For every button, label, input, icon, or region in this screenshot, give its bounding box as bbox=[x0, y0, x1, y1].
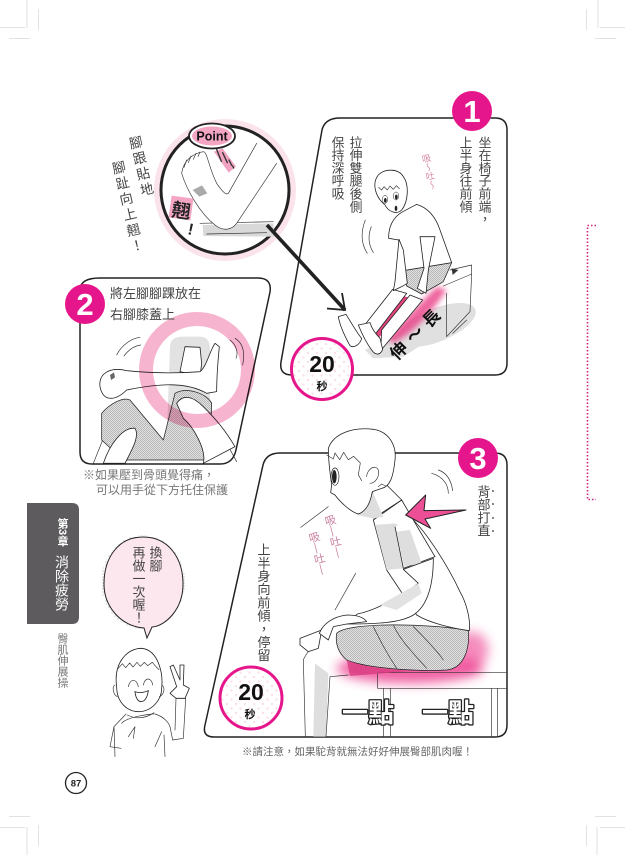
illustration: boy seated leaning forward bbox=[300, 429, 506, 737]
text: breathing note: 吸～吐～ bbox=[420, 153, 437, 190]
text: back straight: 背部打直 bbox=[476, 485, 490, 537]
badge: step number 1 bbox=[452, 91, 492, 131]
badge: step number 2: 2 bbox=[76, 287, 94, 322]
text: little by little: 一點 bbox=[342, 698, 394, 728]
text: chapter 3: 第3章 bbox=[56, 517, 68, 546]
text: heel on floor, toes up bbox=[109, 134, 155, 256]
note: if bone hurts: ※如果壓到骨頭覺得痛， bbox=[83, 467, 215, 482]
page number 87: 87 bbox=[71, 778, 81, 790]
arrow: from point circle to feet bbox=[267, 225, 345, 310]
badge: 20 seconds: 20 bbox=[238, 679, 264, 705]
panel: step 1 seated forward bend bbox=[281, 91, 507, 400]
text: stretch: 伸～長 bbox=[386, 302, 449, 364]
illustration: seated boy stretching legs bbox=[338, 170, 482, 358]
text: sit at chair front: 坐在椅子前端， bbox=[476, 136, 492, 226]
text: breathing notes bbox=[306, 513, 345, 576]
text: little by little: 一點 bbox=[422, 698, 474, 728]
panel: step 3 seated back straight bbox=[204, 429, 507, 737]
text: on right knee: 右腳膝蓋上 bbox=[110, 307, 175, 322]
text: breathing notes: 吸—吐— bbox=[322, 513, 345, 559]
text: little by little bbox=[342, 698, 474, 728]
text: lift: ! bbox=[186, 221, 195, 239]
label: Point bbox=[189, 124, 235, 148]
text: place left ankle: 將左腳腳踝放在 bbox=[110, 286, 201, 301]
illustration: flexed foot bbox=[182, 143, 277, 237]
panel: step 2 crossed ankle bbox=[65, 278, 270, 464]
sidebar: chapter tab bbox=[27, 503, 79, 624]
note: if bone hurts: 可以用手從下方托住保護 bbox=[96, 482, 228, 497]
badge: 20 seconds: 20 bbox=[309, 351, 335, 377]
callout: point circle foot detail bbox=[154, 119, 296, 261]
text: stretch back of legs: 拉伸雙腿後側 bbox=[348, 136, 362, 213]
note: hunched back warning: ※請注意，如果駝背就無法好好伸展臀部肌肉喔！ bbox=[242, 745, 473, 758]
text: breathing notes: 吸—吐— bbox=[306, 530, 329, 576]
highlight ring bbox=[146, 319, 248, 421]
badge: 20 seconds bbox=[292, 338, 352, 400]
text: lift: 翹 bbox=[170, 195, 193, 225]
dotted margin bracket bbox=[588, 226, 596, 500]
text: heel on floor, toes up: 腳跟貼地 bbox=[126, 134, 155, 200]
page number 87 bbox=[66, 772, 86, 794]
badge: step number 2 bbox=[65, 284, 105, 324]
badge: step number 1: 1 bbox=[463, 94, 481, 129]
text: lift bbox=[169, 195, 195, 239]
text: heel on floor, toes up: 腳趾向上翹！ bbox=[109, 159, 146, 256]
text: upper body forward: 上半身向前傾，停留 bbox=[256, 543, 270, 662]
note: if bone hurts bbox=[83, 467, 228, 497]
illustration: crossed legs top view bbox=[93, 337, 244, 463]
text: do it again: 再做一次喔！ bbox=[130, 546, 146, 624]
illustration: smiling boy with peace sign bbox=[110, 648, 189, 757]
badge: 20 seconds: 秒 bbox=[316, 379, 328, 393]
badge: step number 3 bbox=[458, 438, 498, 478]
badge: 20 seconds: 秒 bbox=[244, 707, 256, 721]
text: gluteal stretch: 臀肌伸展操 bbox=[56, 633, 68, 689]
badge: step number 3: 3 bbox=[469, 441, 487, 476]
text: switch legs: 換腳 bbox=[148, 546, 162, 572]
speech bubble bbox=[101, 535, 185, 638]
text: lean forward: 上半身往前傾 bbox=[458, 136, 472, 213]
text: relieve fatigue: 消除疲勞 bbox=[54, 555, 70, 611]
badge: 20 seconds bbox=[220, 667, 282, 729]
label: Point: Point bbox=[196, 130, 228, 144]
text: breathe deeply: 保持深呼吸 bbox=[330, 136, 344, 200]
